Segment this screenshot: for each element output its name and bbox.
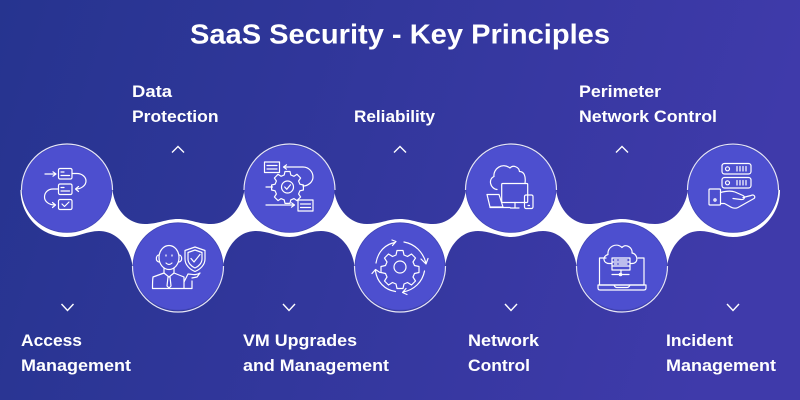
circle 3: VM Upgrades and Management	[244, 144, 335, 232]
label: Incident Management	[666, 331, 776, 375]
label: Data Protection: Protection	[132, 107, 218, 126]
circle 1: Access Management	[22, 144, 112, 232]
label: Incident Management: Incident	[666, 331, 733, 350]
label: Perimeter Network Control: Network Control	[579, 107, 717, 126]
arrow: up chevrons	[172, 146, 628, 152]
label: Access Management	[21, 331, 131, 375]
label: Network Control: Network	[468, 331, 540, 350]
arrow: down chevrons	[62, 304, 739, 310]
circle 4: Reliability	[354, 223, 446, 312]
icon: servers on a hand	[709, 164, 755, 208]
label: Perimeter Network Control: Perimeter	[579, 82, 661, 101]
circle 2: Data Protection	[132, 223, 224, 312]
label: Data Protection	[132, 82, 218, 126]
title: SaaS Security - Key Principles	[190, 18, 610, 50]
label: Network Control: Control	[468, 356, 530, 375]
label: Data Protection: Data	[132, 82, 173, 101]
circle 5: Network Control	[466, 144, 556, 232]
icon: cloud and devices	[487, 166, 533, 208]
circle 6: Perimeter Network Control	[576, 223, 668, 312]
label: Incident Management: Management	[666, 356, 776, 375]
label: VM Upgrades and Management: VM Upgrades	[243, 331, 357, 350]
label: VM Upgrades and Management	[243, 331, 389, 375]
icon: gear with cycle arrows	[372, 240, 428, 294]
label: Reliability: Reliability	[354, 107, 436, 126]
icon: gear with check and documents	[264, 162, 313, 211]
label: Access Management: Access	[21, 331, 82, 350]
label: VM Upgrades and Management: and Management	[243, 356, 389, 375]
label: Perimeter Network Control	[579, 82, 717, 126]
label: Network Control	[468, 331, 540, 375]
icon: laptop with cloud server	[598, 245, 646, 290]
icon: person with shield	[152, 246, 205, 288]
circle 7: Incident Management	[688, 144, 778, 232]
label: Access Management: Management	[21, 356, 131, 375]
white wave connector	[20, 190, 780, 266]
icon: workflow checklist	[44, 168, 86, 210]
